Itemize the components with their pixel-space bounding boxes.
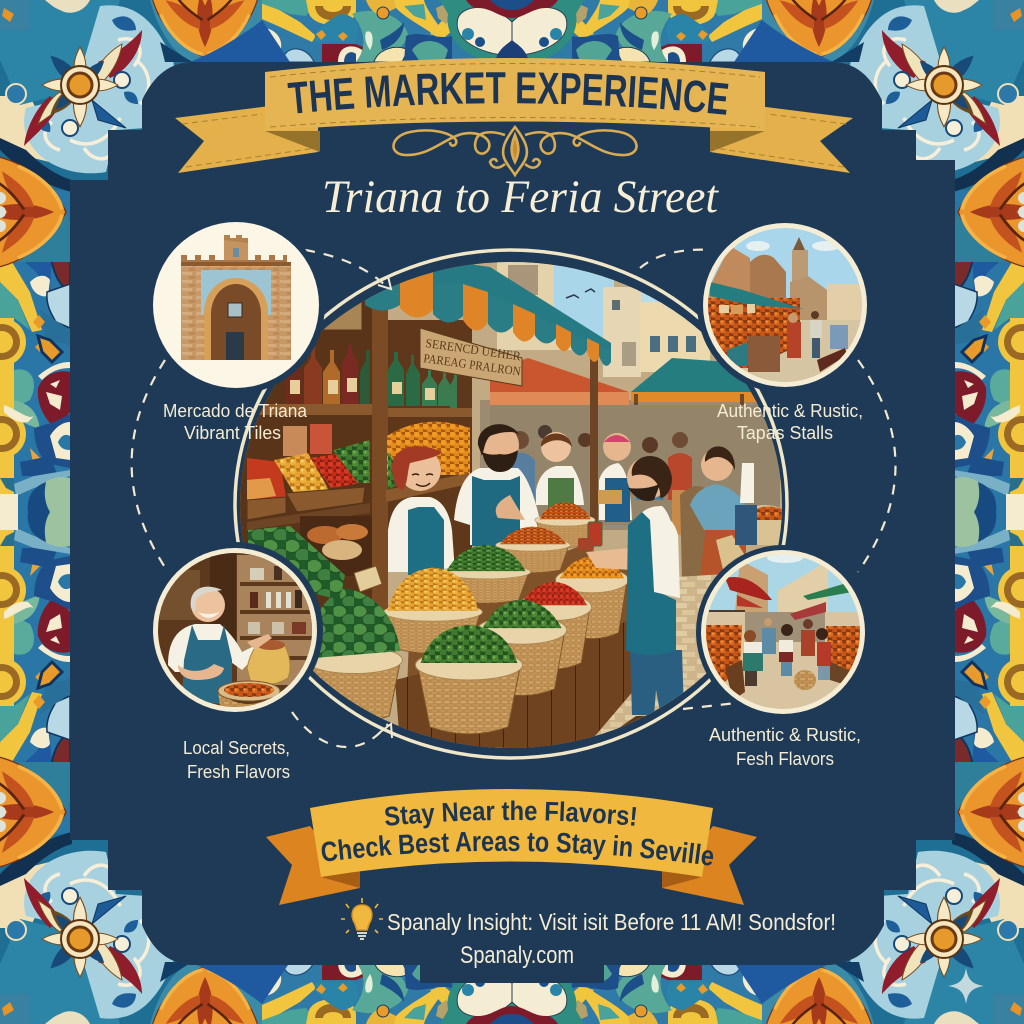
leafy greens xyxy=(248,526,345,600)
ribbon headline: Stay Near the Flavors! xyxy=(385,800,636,828)
subtitle: Triana to Feria Street xyxy=(322,171,719,223)
side basket stall xyxy=(680,486,785,578)
hanging sign: PAREAG PRALRON xyxy=(423,351,522,379)
medallion: street scene xyxy=(696,545,870,719)
label: Fresh Flavors: Authentic & Rustic, xyxy=(709,725,861,745)
call to action ribbon xyxy=(266,789,757,905)
produce crates xyxy=(247,424,469,530)
vendor: woman in green apron xyxy=(536,432,584,510)
street illustration xyxy=(708,228,862,382)
dashed route connectors xyxy=(132,250,896,747)
tail folds xyxy=(321,870,702,888)
title text: THE MARKET EXPERIENCE xyxy=(287,72,728,115)
street illustration xyxy=(706,555,860,709)
price tag xyxy=(354,566,382,592)
bottles xyxy=(285,345,457,408)
wooden stall back xyxy=(237,300,598,640)
shop illustration xyxy=(158,553,312,707)
ribbon tail right xyxy=(710,100,853,173)
crowd xyxy=(490,405,780,535)
ribbon fold shadows xyxy=(265,131,765,152)
central market scene xyxy=(237,260,790,760)
vendor: woman with red scarf xyxy=(388,446,455,575)
label: Local Secrets: Fresh Flavors xyxy=(187,762,290,782)
hanging sign xyxy=(420,328,522,386)
label: Fresh Flavors xyxy=(709,725,861,769)
vendor: bearded man in foreground xyxy=(578,456,684,730)
medallion: Mercado de Triana gate xyxy=(147,216,325,394)
background: sky and buildings xyxy=(237,260,790,755)
label: Local Secrets: Local Secrets, xyxy=(183,738,290,758)
medallion: local shopkeeper xyxy=(147,542,323,720)
orange tails xyxy=(266,826,757,905)
stone street xyxy=(586,574,718,738)
gold flourish xyxy=(394,127,636,175)
label: Tapas Stalls: Authentic & Rustic, xyxy=(717,401,863,421)
label: Local Secrets xyxy=(183,738,290,782)
vendor: bearded man xyxy=(454,424,542,546)
baskets of produce xyxy=(306,502,628,734)
ribbon body xyxy=(265,58,765,131)
yellow band xyxy=(310,789,713,877)
label: Mercado de Triana: Mercado de Triana xyxy=(163,401,308,421)
medallion: tapas stalls street xyxy=(697,217,873,393)
ribbon tail left xyxy=(175,100,318,173)
icon: light bulb xyxy=(341,898,383,939)
label: Fresh Flavors: Fesh Flavors xyxy=(736,749,834,769)
ribbon subhead: Check Best Areas to Stay in Seville xyxy=(322,832,714,866)
market counter xyxy=(405,545,650,750)
insight text: Spanaly Insight: Visit isit Before 11 AM! Sondsfor! xyxy=(387,909,836,935)
scene ring xyxy=(235,250,787,758)
arrowheads xyxy=(378,276,392,738)
label: Mercado de Triana xyxy=(163,401,308,443)
hanging sign: SERENCD UEHER xyxy=(425,336,522,363)
title ribbon xyxy=(175,58,853,173)
label: Tapas Stalls xyxy=(717,401,863,443)
bread under shelf xyxy=(300,516,372,576)
red awning xyxy=(490,358,629,392)
label: Tapas Stalls: Tapas Stalls xyxy=(737,423,833,443)
label: Mercado de Triana: Vibrant Tiles xyxy=(184,423,281,443)
green awning xyxy=(631,358,756,405)
main awning xyxy=(365,263,611,366)
gate building xyxy=(181,235,291,360)
navy central panel xyxy=(70,62,955,983)
website: Spanaly.com xyxy=(460,942,574,969)
sparkle mark xyxy=(948,968,984,1004)
orange shelf xyxy=(387,422,470,475)
customer: woman in blue xyxy=(690,446,757,578)
vendor: man in blue apron xyxy=(598,433,632,522)
